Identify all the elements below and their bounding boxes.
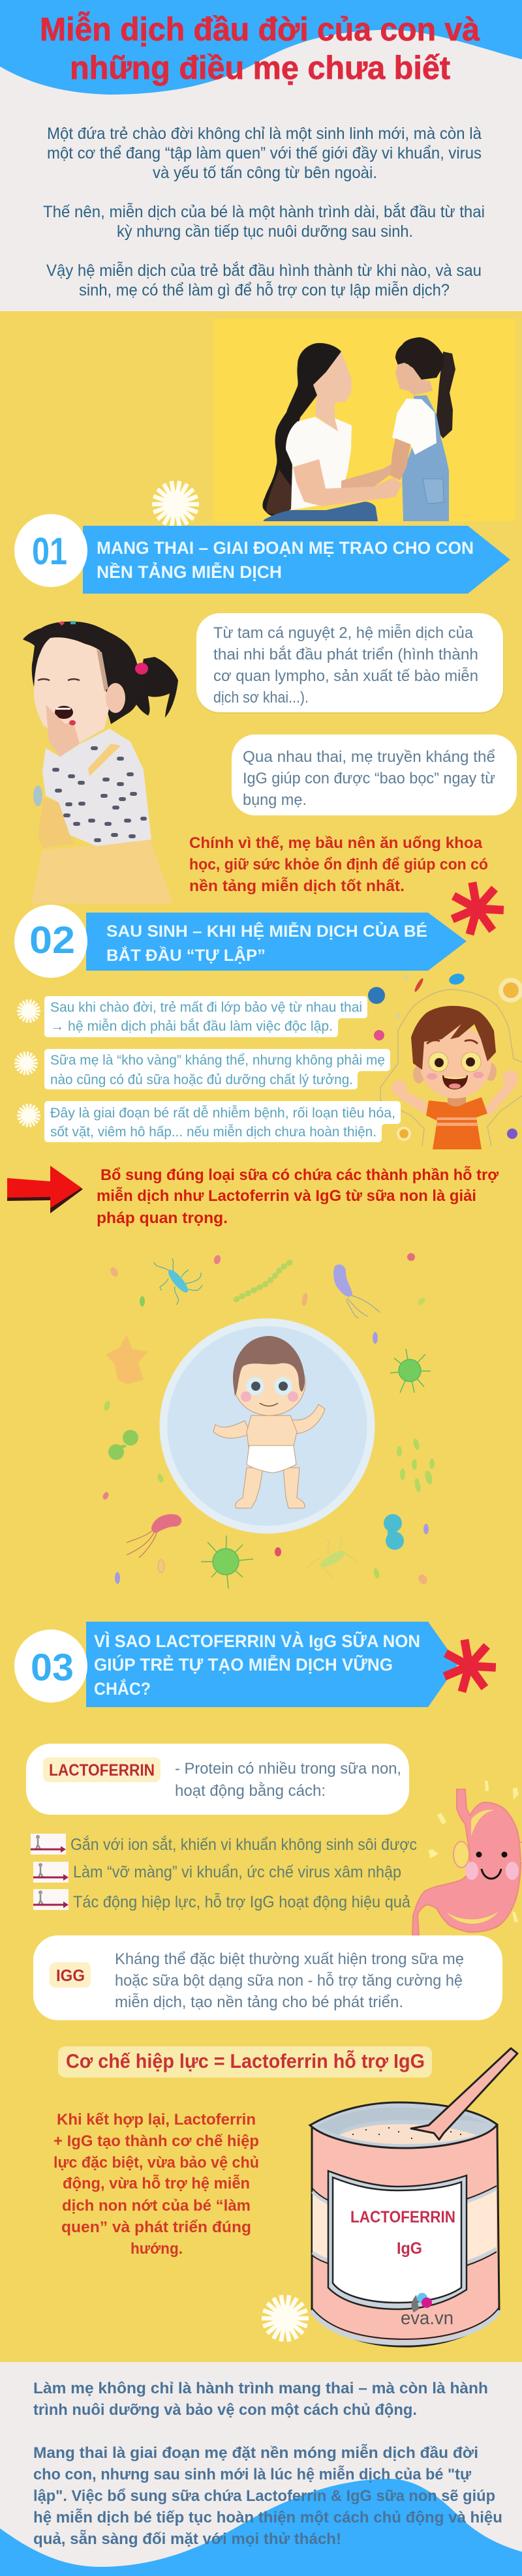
illustration: boy with germs [368,972,522,1149]
bubble text: thai nhi bắt đầu phát triển (hình thành [213,646,478,663]
intro text block: kỳ nhưng cần tiếp tục nuôi dưỡng sau sinh. [117,222,413,241]
bubble text: cơ quan lympho, sản xuất tế bào miễn [213,667,478,685]
photo: laughing girl [23,621,178,903]
icon: burst [14,1052,38,1075]
number circle [14,905,87,978]
logo: eva.vn: eva.vn [401,2308,453,2329]
red explanation text: lực đặc biệt, vừa bảo vệ chủ [54,2154,259,2172]
closing text block: hệ miễn dịch bé tiếp tục hoàn thiện một cách chủ động và hiệu [33,2508,502,2526]
bullet text: Sữa mẹ là “kho vàng” kháng thể, nhưng không phải mẹ [50,1053,385,1068]
closing text block: cho con, nhưng sau sinh mới là lúc hệ miễn dịch của bé "tự [33,2465,472,2483]
banner heading: CHẮC? [94,1678,151,1699]
red advice text: học, giữ sức khỏe ổn định để giúp con có [189,856,488,873]
banner heading: VÌ SAO LACTOFERRIN VÀ IgG SỮA NON [94,1631,420,1651]
can body [312,2125,499,2346]
bullet card [44,1049,390,1089]
child [390,337,455,521]
callout bubble: IgG through placenta [232,735,517,815]
number 03: 03 [31,1646,74,1689]
red explanation text: hướng. [130,2240,183,2258]
red recommendation text [97,1166,499,1227]
title [40,11,480,86]
can label text: LACTOFERRIN [350,2208,455,2226]
intro text block: Vậy hệ miễn dịch của trẻ bắt đầu hình thành từ khi nào, và sau [46,261,482,280]
bullet card [44,996,367,1037]
banner heading: GIÚP TRẺ TỰ TẠO MIỄN DỊCH VỮNG [94,1654,393,1674]
icon: white starburst top [152,481,199,527]
closing text block: quả, sẵn sàng đối mặt với mọi thử thách! [33,2530,341,2548]
bullet text [50,1106,395,1140]
icon: red asterisk 03 [444,1640,496,1692]
red recommendation text: miễn dịch như Lactoferrin và IgG từ sữa non là giải [97,1187,476,1205]
closing text block: Mang thai là giai đoạn mẹ đặt nền móng miễn dịch đầu đời [33,2444,478,2462]
bubble text: IgG giúp con được “bao bọc” ngay từ [243,770,495,787]
description: hoạt động bằng cách: [175,1782,326,1800]
number circle [14,514,87,587]
bullet text [50,1000,362,1034]
mother [262,343,402,521]
footer blue wave [0,2479,522,2576]
bubble text: Qua nhau thai, mẹ truyền kháng thể [243,748,495,766]
banner heading: SAU SINH – KHI HỆ MIỄN DỊCH CỦA BÉ [106,921,427,941]
mechanism 1: Gắn với ion sắt, khiến vi khuẩn không sinh sôi được [70,1835,417,1854]
mechanism 2: Làm “vỡ màng” vi khuẩn, ức chế virus xâm nhập [73,1863,401,1881]
label: IgG [50,1962,91,1988]
label text: LACTOFERRIN [49,1761,155,1780]
description: miễn dịch, tạo nền tảng cho bé phát triển. [115,1993,403,2011]
banner heading [97,538,474,582]
red explanation text: + IgG tạo thành cơ chế hiệp [54,2132,259,2150]
bullet text: → hệ miễn dịch phải bắt đầu làm việc độc lập. [50,1019,333,1034]
intro text block: Một đứa trẻ chào đời không chỉ là một sinh linh mới, mà còn là [47,125,482,143]
title: những điều mẹ chưa biết [70,50,450,86]
intro text block: Thế nên, miễn dịch của bé là một hành trình dài, bắt đầu từ thai [43,202,485,221]
illustration: milk powder can [310,2048,517,2346]
description: - Protein có nhiều trong sữa non, [175,1760,401,1778]
bullet text: nào cũng có đủ sữa hoặc đủ dưỡng chất lý tưởng. [50,1072,353,1087]
closing text block: Làm mẹ không chỉ là hành trình mang thai – mà còn là hành [33,2380,488,2397]
banner 02 [14,905,467,978]
red explanation text: Khi kết hợp lại, Lactoferrin [57,2111,256,2129]
description [115,1950,464,2011]
icon: white starburst bottom [262,2295,309,2342]
closing text block [33,2380,502,2548]
illustration: baby in protective bubble [159,1318,375,1534]
icon: walker arrow 3 [33,1889,69,1910]
icon: red arrow [7,1166,83,1213]
red explanation text: dịch non nớt của bé “làm [62,2197,251,2215]
can label [328,2171,467,2309]
icon: burst [17,999,40,1023]
bullet text: Sau khi chào đời, trẻ mất đi lớp bảo vệ từ nhau thai [50,1000,362,1015]
red explanation text: quen” và phát triển đúng [61,2219,251,2236]
intro text block: và yếu tố tấn công từ bên ngoài. [153,164,377,182]
banner 03 [14,1622,458,1707]
banner heading [94,1631,420,1699]
bubble text [243,748,495,809]
label text: IGG [56,1967,85,1985]
arrow banner [83,526,510,594]
bullet 2 [14,1049,390,1089]
bullet text: sốt vặt, viêm hô hấp... nếu miễn dịch chưa hoàn thiện. [50,1125,376,1140]
banner heading: NỀN TẢNG MIỄN DỊCH [97,561,282,582]
can label text IgG: IgG [397,2239,422,2258]
logo: eva.vn [401,2293,453,2329]
bubble text [213,624,478,706]
intro text block [43,125,485,299]
heading: synergy mechanism [58,2046,432,2078]
description: hoặc sữa bột dạng sữa non - hỗ trợ tăng cường hệ [115,1972,463,1990]
banner heading: MANG THAI – GIAI ĐOẠN MẸ TRAO CHO CON [97,538,474,558]
mechanism 3: Tác động hiệp lực, hỗ trợ IgG hoạt động hiệu quả [73,1892,410,1911]
banner heading [106,921,427,965]
red recommendation text: Bổ sung đúng loại sữa có chứa các thành phần hỗ trợ [100,1166,499,1184]
closing text block: trình nuôi dưỡng và bảo vệ con một cách chủ động. [33,2401,417,2419]
panel: lactoferrin [26,1744,409,1815]
icon: burst [17,1104,40,1127]
icon: walker arrow 2 [33,1862,69,1883]
title: Miễn dịch đầu đời của con và [40,11,480,48]
callout bubble: second trimester [196,613,504,714]
closing text block: lập". Việc bổ sung sữa chứa Lactoferrin & IgG sữa non sẽ giúp [33,2487,495,2505]
number 02: 02 [29,919,75,962]
red explanation text [54,2111,259,2258]
bullet 1 [17,996,367,1037]
number 01: 01 [32,530,67,573]
panel: IgG [33,1935,502,2020]
arrow banner [86,1622,458,1707]
bubble text: bụng mẹ. [243,791,307,809]
red advice text [189,834,488,895]
page background: yellow section [0,311,522,2363]
banner 01 [14,514,510,594]
page background: closing section [0,2362,522,2576]
bullet text [50,1053,385,1087]
bubble text: dịch sơ khai...). [213,689,309,706]
illustration: smiling stomach [412,1781,522,1935]
number circle [14,1629,87,1703]
bullet card [44,1101,401,1142]
intro text block: một cơ thể đang “tập làm quen” với thế giới đầy vi khuẩn, virus [47,144,482,162]
description [175,1760,401,1800]
red recommendation text: pháp quan trọng. [97,1209,228,1227]
heading: synergy mechanism: Cơ chế hiệp lực = Lactoferrin hỗ trợ IgG [66,2050,425,2072]
list: lactoferrin mechanisms [31,1834,417,1911]
bullet 3 [17,1101,401,1142]
red advice text: Chính vì thế, mẹ bầu nên ăn uống khoa [189,834,483,852]
photo: mother and child [213,319,515,521]
icon: red asterisk 02 [452,883,504,934]
can rim [310,2102,497,2148]
label: lactoferrin [43,1757,161,1782]
bullet text: Đây là giai đoạn bé rất dễ nhiễm bệnh, rối loạn tiêu hóa, [50,1106,395,1121]
bubble text: Từ tam cá nguyệt 2, hệ miễn dịch của [213,624,474,642]
intro text block: sinh, mẹ có thể làm gì để hỗ trợ con tự lập miễn dịch? [79,280,450,299]
header blue wave [0,0,522,95]
illustration: germs around the bubble [102,1253,435,1588]
description: Kháng thể đặc biệt thường xuất hiện trong sữa mẹ [115,1950,464,1968]
baby [213,1336,325,1508]
banner heading: BẮT ĐẦU “TỰ LẬP” [106,945,266,965]
icon: walker arrow 1 [31,1834,66,1855]
red explanation text: động, vừa hỗ trợ hệ miễn [63,2174,250,2192]
spoon [411,2048,517,2140]
arrow banner [86,913,467,971]
page background: light section [0,0,522,312]
red advice text: nền tảng miễn dịch tốt nhất. [189,877,405,895]
